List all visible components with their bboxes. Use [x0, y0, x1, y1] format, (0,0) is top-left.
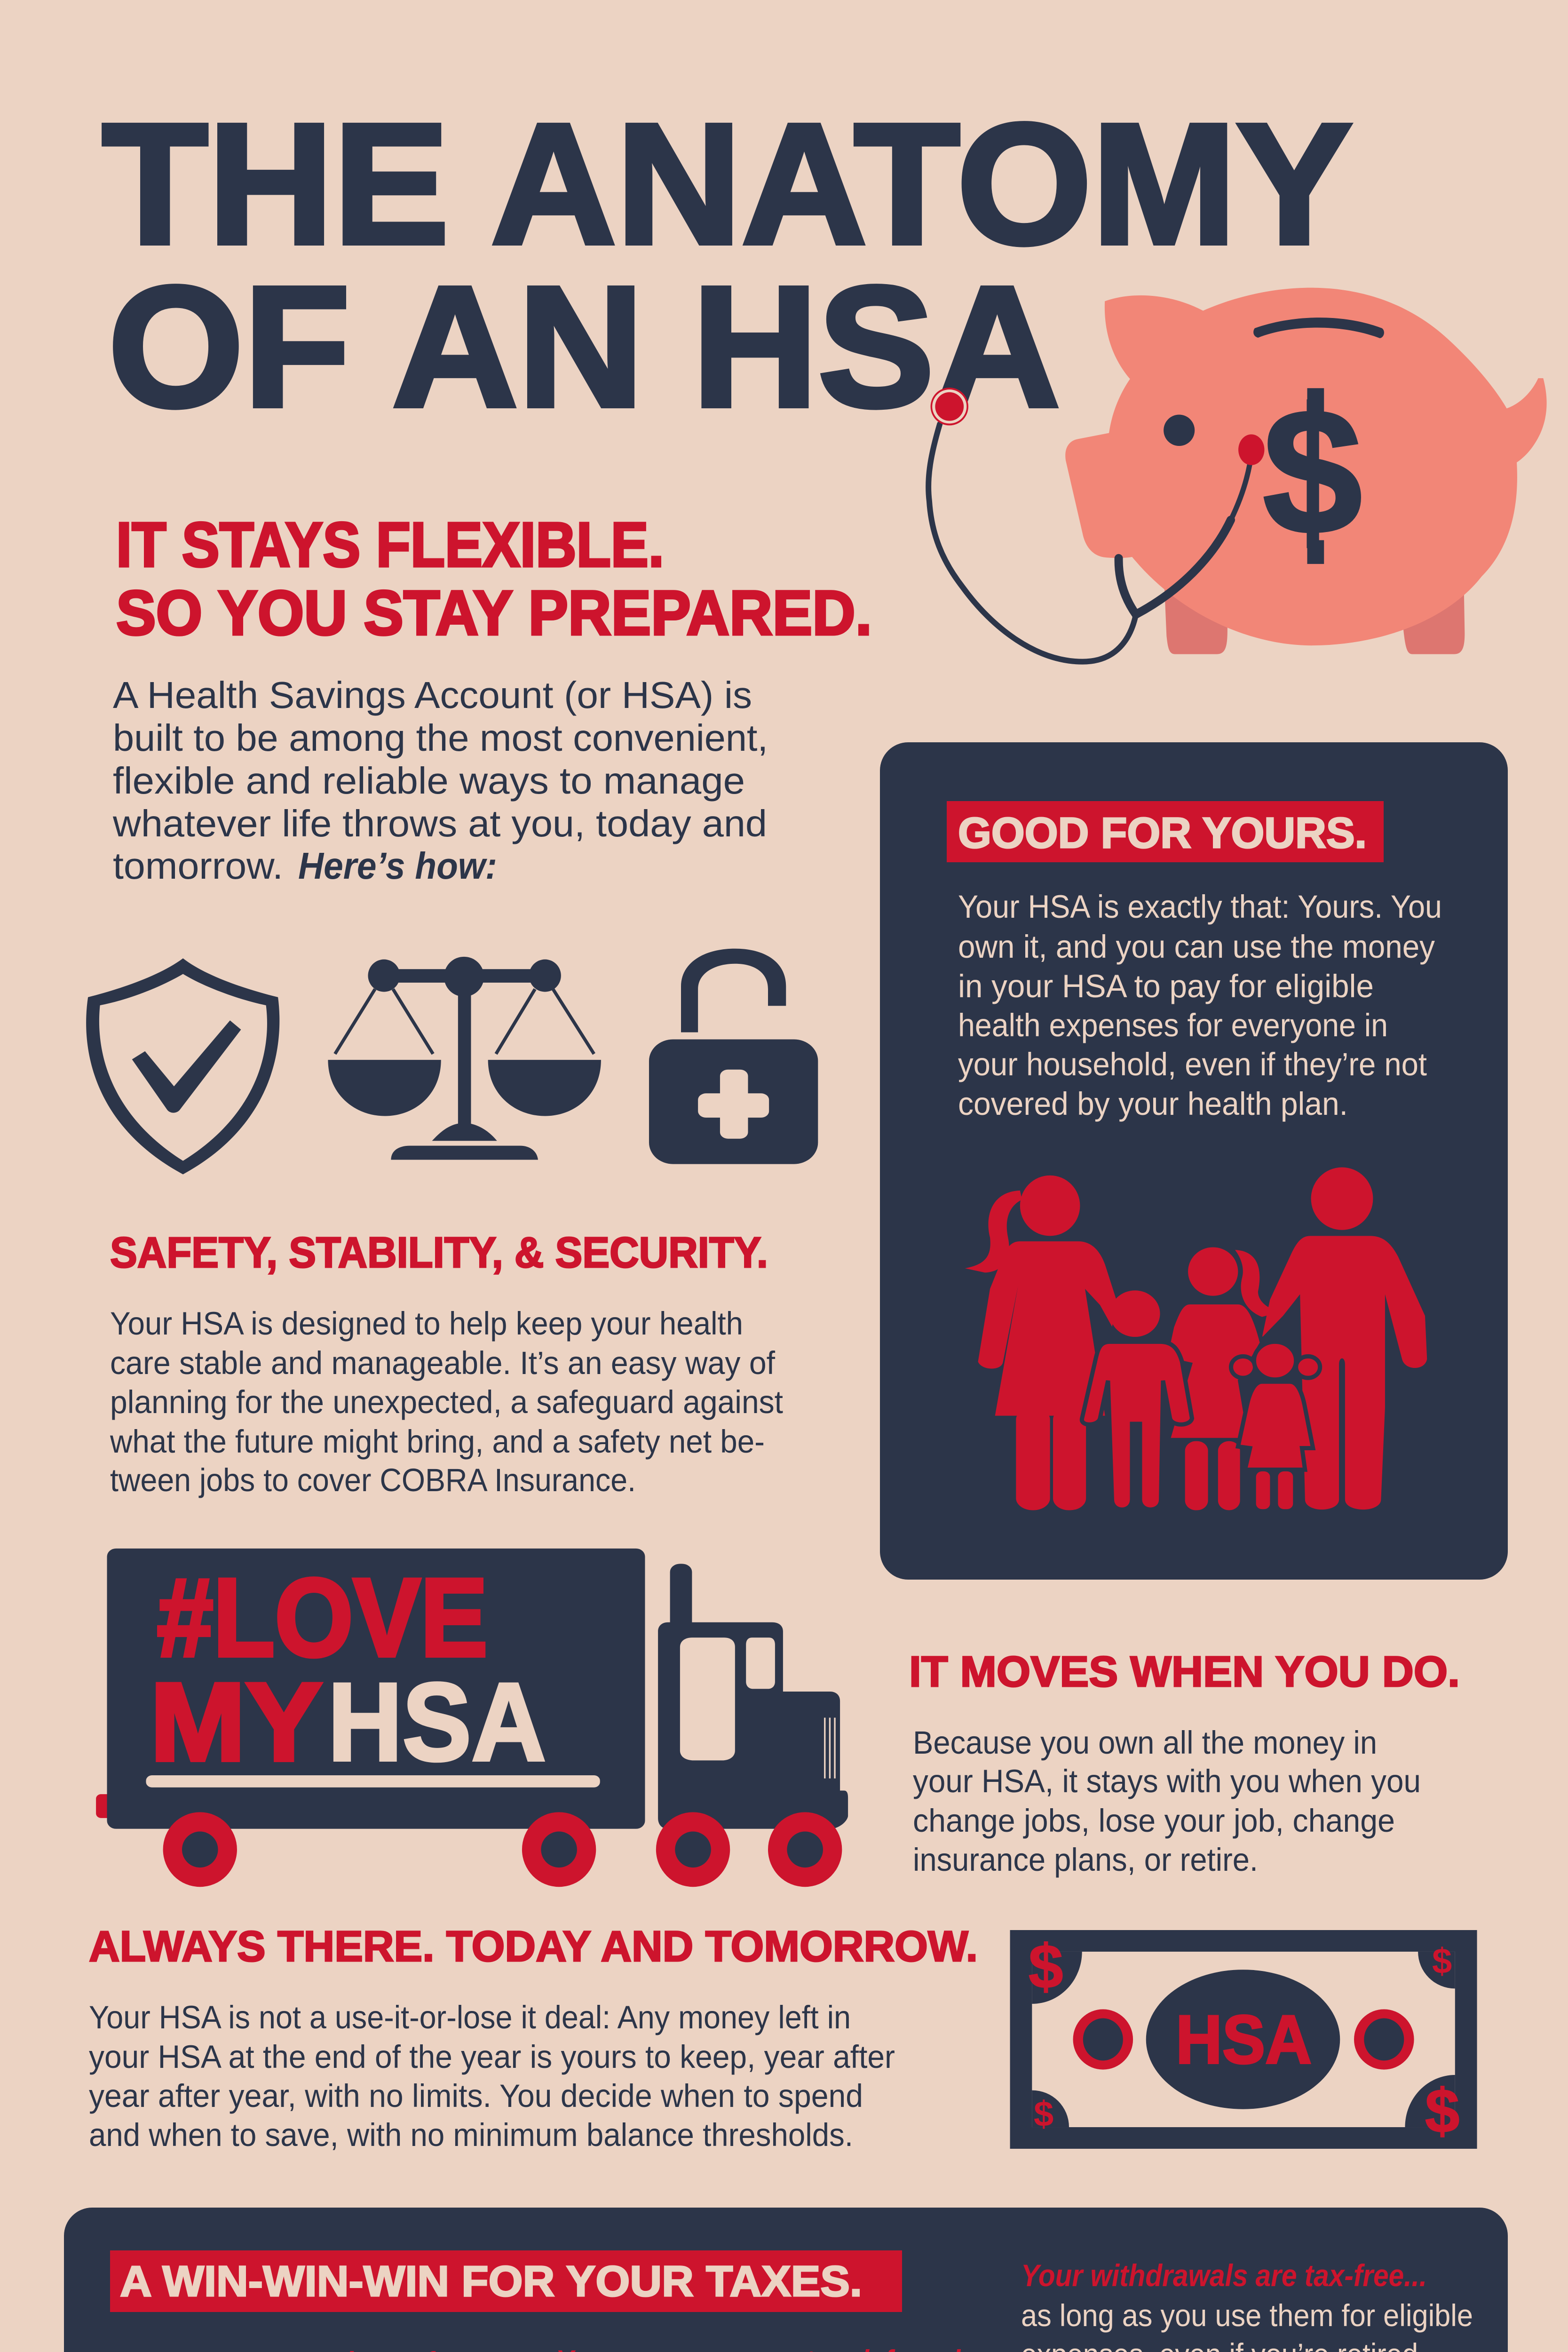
panel text: your household, even if they’re not — [958, 1046, 1427, 1082]
panel text: in your HSA to pay for eligible — [958, 968, 1374, 1004]
text: always there: Your HSA is not a use-it-or-lose it deal: Any money left in — [89, 1999, 851, 2035]
text: always there: and when to save, with no minimum balance thresholds. — [89, 2117, 853, 2153]
bill text: HSA — [1176, 2001, 1312, 2078]
truck text — [150, 1556, 546, 1784]
illustration: HSA dollar bill — [1010, 1930, 1477, 2149]
text: it moves: change jobs, lose your job, change — [913, 1803, 1395, 1839]
text: safety — [110, 1305, 783, 1498]
bill text: $ — [1034, 2094, 1053, 2134]
intro text: A Health Savings Account (or HSA) is — [113, 674, 752, 716]
pig eye — [1164, 414, 1195, 446]
intro text — [112, 674, 768, 887]
little girl — [1231, 1342, 1320, 1509]
stethoscope tube — [928, 424, 1250, 662]
heading: it stays flexible: IT STAYS FLEXIBLE. — [116, 510, 664, 580]
truck tail light — [96, 1794, 116, 1818]
panel: taxes — [64, 2208, 1508, 2352]
trailer — [107, 1549, 645, 1829]
cab — [658, 1564, 848, 1829]
intro text: built to be among the most convenient, — [113, 717, 768, 759]
bill text: $ — [1425, 2076, 1459, 2145]
pig nose — [1238, 434, 1264, 465]
dollar sign on pig: $ — [1263, 372, 1362, 572]
cab windows — [146, 1637, 836, 1788]
dollar sign stubs — [1307, 388, 1324, 564]
pig body — [1065, 288, 1547, 645]
icon: shield with check — [86, 958, 279, 1174]
title: THE ANATOMY — [102, 88, 1352, 280]
text: it moves: Because you own all the money in — [913, 1724, 1377, 1761]
pig legs — [1164, 585, 1465, 654]
text: safety: planning for the unexpected, a safeguard against — [110, 1384, 783, 1420]
intro text: whatever life throws at you, today and — [112, 803, 767, 844]
heading tag: GOOD FOR YOURS. — [958, 809, 1367, 857]
panel text: covered by your health plan. — [958, 1086, 1348, 1122]
icon: family — [965, 1168, 1427, 1510]
column: withdrawals tax-free: as long as you use them for eligible — [1021, 2298, 1473, 2333]
heading: it stays flexible — [116, 510, 872, 648]
stethoscope chest piece — [931, 388, 968, 425]
text: safety: care stable and manageable. It’s an easy way of — [110, 1345, 776, 1381]
panel text: Your HSA is exactly that: Yours. You — [958, 889, 1442, 925]
column: withdrawals tax-free — [1021, 2258, 1473, 2352]
bill text — [1029, 1932, 1459, 2145]
boy — [1082, 1290, 1192, 1510]
heading: it moves: IT MOVES WHEN YOU DO. — [909, 1648, 1460, 1696]
panel text: health expenses for everyone in — [958, 1007, 1388, 1043]
panel: good for yours — [880, 742, 1508, 1580]
panel text — [958, 889, 1442, 1122]
text: it moves — [913, 1724, 1421, 1878]
icon: balance scales — [328, 957, 601, 1160]
text: always there — [89, 1999, 895, 2153]
panel text: own it, and you can use the money — [958, 929, 1435, 965]
wheels — [163, 1812, 842, 1887]
father — [1262, 1168, 1427, 1510]
intro text: flexible and reliable ways to manage — [113, 760, 745, 802]
bill text: $ — [1029, 1932, 1063, 2001]
mother — [965, 1176, 1118, 1510]
truck text: #LOVE — [157, 1556, 488, 1680]
intro text: Here’s how: — [298, 845, 497, 887]
heading tag: taxes: A WIN-WIN-WIN FOR YOUR TAXES. — [120, 2257, 862, 2305]
text: it moves: your HSA, it stays with you when you — [913, 1763, 1421, 1799]
bill text: $ — [1432, 1941, 1452, 1981]
title: OF AN HSA — [108, 251, 1060, 443]
heading: safety: SAFETY, STABILITY, & SECURITY. — [110, 1229, 768, 1277]
coin slot — [1253, 318, 1384, 338]
truck text: MY — [150, 1660, 322, 1784]
icon: unlocked padlock with medical cross — [649, 949, 818, 1164]
text: always there: your HSA at the end of the year is yours to keep, year after — [89, 2039, 895, 2075]
girl — [1165, 1247, 1282, 1510]
heading: always there: ALWAYS THERE. TODAY AND TOMORROW. — [89, 1923, 978, 1971]
illustration: piggy bank with stethoscope — [928, 288, 1547, 662]
text: it moves: insurance plans, or retire. — [913, 1842, 1258, 1878]
text: safety: Your HSA is designed to help keep your health — [110, 1305, 743, 1342]
text: safety: what the future might bring, and a safety net be- — [110, 1423, 765, 1460]
column: withdrawals tax-free: Your withdrawals are tax-free... — [1021, 2258, 1427, 2293]
truck text: HSA — [328, 1660, 546, 1784]
illustration: truck — [96, 1549, 848, 1887]
text: always there: year after year, with no limits. You decide when to spend — [89, 2078, 863, 2114]
title — [102, 88, 1352, 443]
text: safety: tween jobs to cover COBRA Insurance. — [110, 1462, 636, 1498]
heading: it stays flexible: SO YOU STAY PREPARED. — [116, 578, 872, 648]
intro text: tomorrow. — [113, 845, 283, 887]
